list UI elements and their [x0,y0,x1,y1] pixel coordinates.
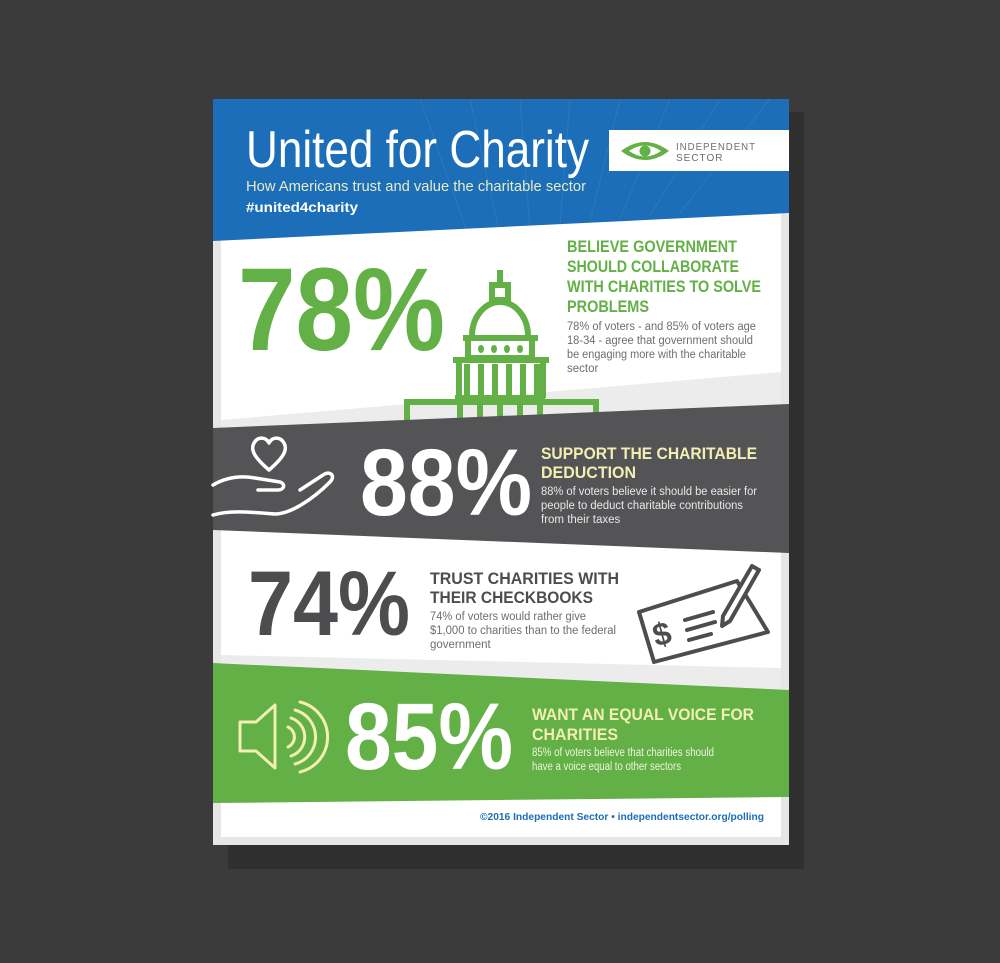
body text: 85% of voters believe that charities should [532,747,714,759]
big number 74%: 74% [248,553,410,655]
title: United for Charity [246,121,589,179]
body text: people to deduct charitable contributions [541,500,743,512]
panel: header [213,99,789,241]
icon: check with pen [639,566,768,662]
heading: BELIEVE GOVERNMENT [567,237,738,256]
heading: SUPPORT THE CHARITABLE [541,444,757,463]
heading: THEIR CHECKBOOKS [430,588,593,607]
heading: WANT AN EQUAL VOICE FOR [532,705,754,724]
logo [609,130,789,171]
body text: 78% of voters - and 85% of voters age [567,321,756,333]
panel: 88% deduction [213,404,789,553]
icon: speaker [240,702,328,772]
heading [567,237,761,316]
body text: $1,000 to charities than to the federal [430,625,616,637]
heading: PROBLEMS [567,297,649,316]
body text [532,747,714,773]
body text: 88% of voters believe it should be easier for [541,486,757,498]
body text [430,611,616,651]
heading [541,444,757,482]
card [213,99,789,845]
icon: hand with heart [213,438,332,515]
body text: 74% of voters would rather give [430,611,586,623]
panel: 74% checkbooks [221,553,781,690]
hashtag: #united4charity [246,199,358,215]
logo: SECTOR [676,153,724,164]
heading: WITH CHARITIES TO SOLVE [567,277,761,296]
subtitle: How Americans trust and value the charitable sector [246,178,586,195]
heading: TRUST CHARITIES WITH [430,569,619,588]
body text: 18-34 - agree that government should [567,335,753,347]
body text [567,321,756,375]
heading [430,569,619,607]
heading: CHARITIES [532,725,618,744]
heading: DEDUCTION [541,463,636,482]
body text: government [430,639,492,651]
body text: sector [567,363,598,375]
heading [532,705,754,744]
big number 88%: 88% [360,430,532,536]
icon: check with pen: $ [649,614,675,654]
body text: have a voice equal to other sectors [532,761,681,773]
body text: be engaging more with the charitable [567,349,746,361]
icon: capitol [407,270,596,432]
icon: eye [621,142,669,160]
panel: 78% government [221,237,781,432]
big number 78%: 78% [238,244,445,376]
big number 85%: 85% [345,684,513,790]
footer: ©2016 Independent Sector • independentsector.org/polling [480,811,764,823]
body text [541,486,757,526]
card shadow [228,112,804,869]
logo: INDEPENDENT [676,142,756,153]
panel: 85% equal voice [213,663,789,803]
heading: SHOULD COLLABORATE [567,257,739,276]
body text: from their taxes [541,514,620,526]
